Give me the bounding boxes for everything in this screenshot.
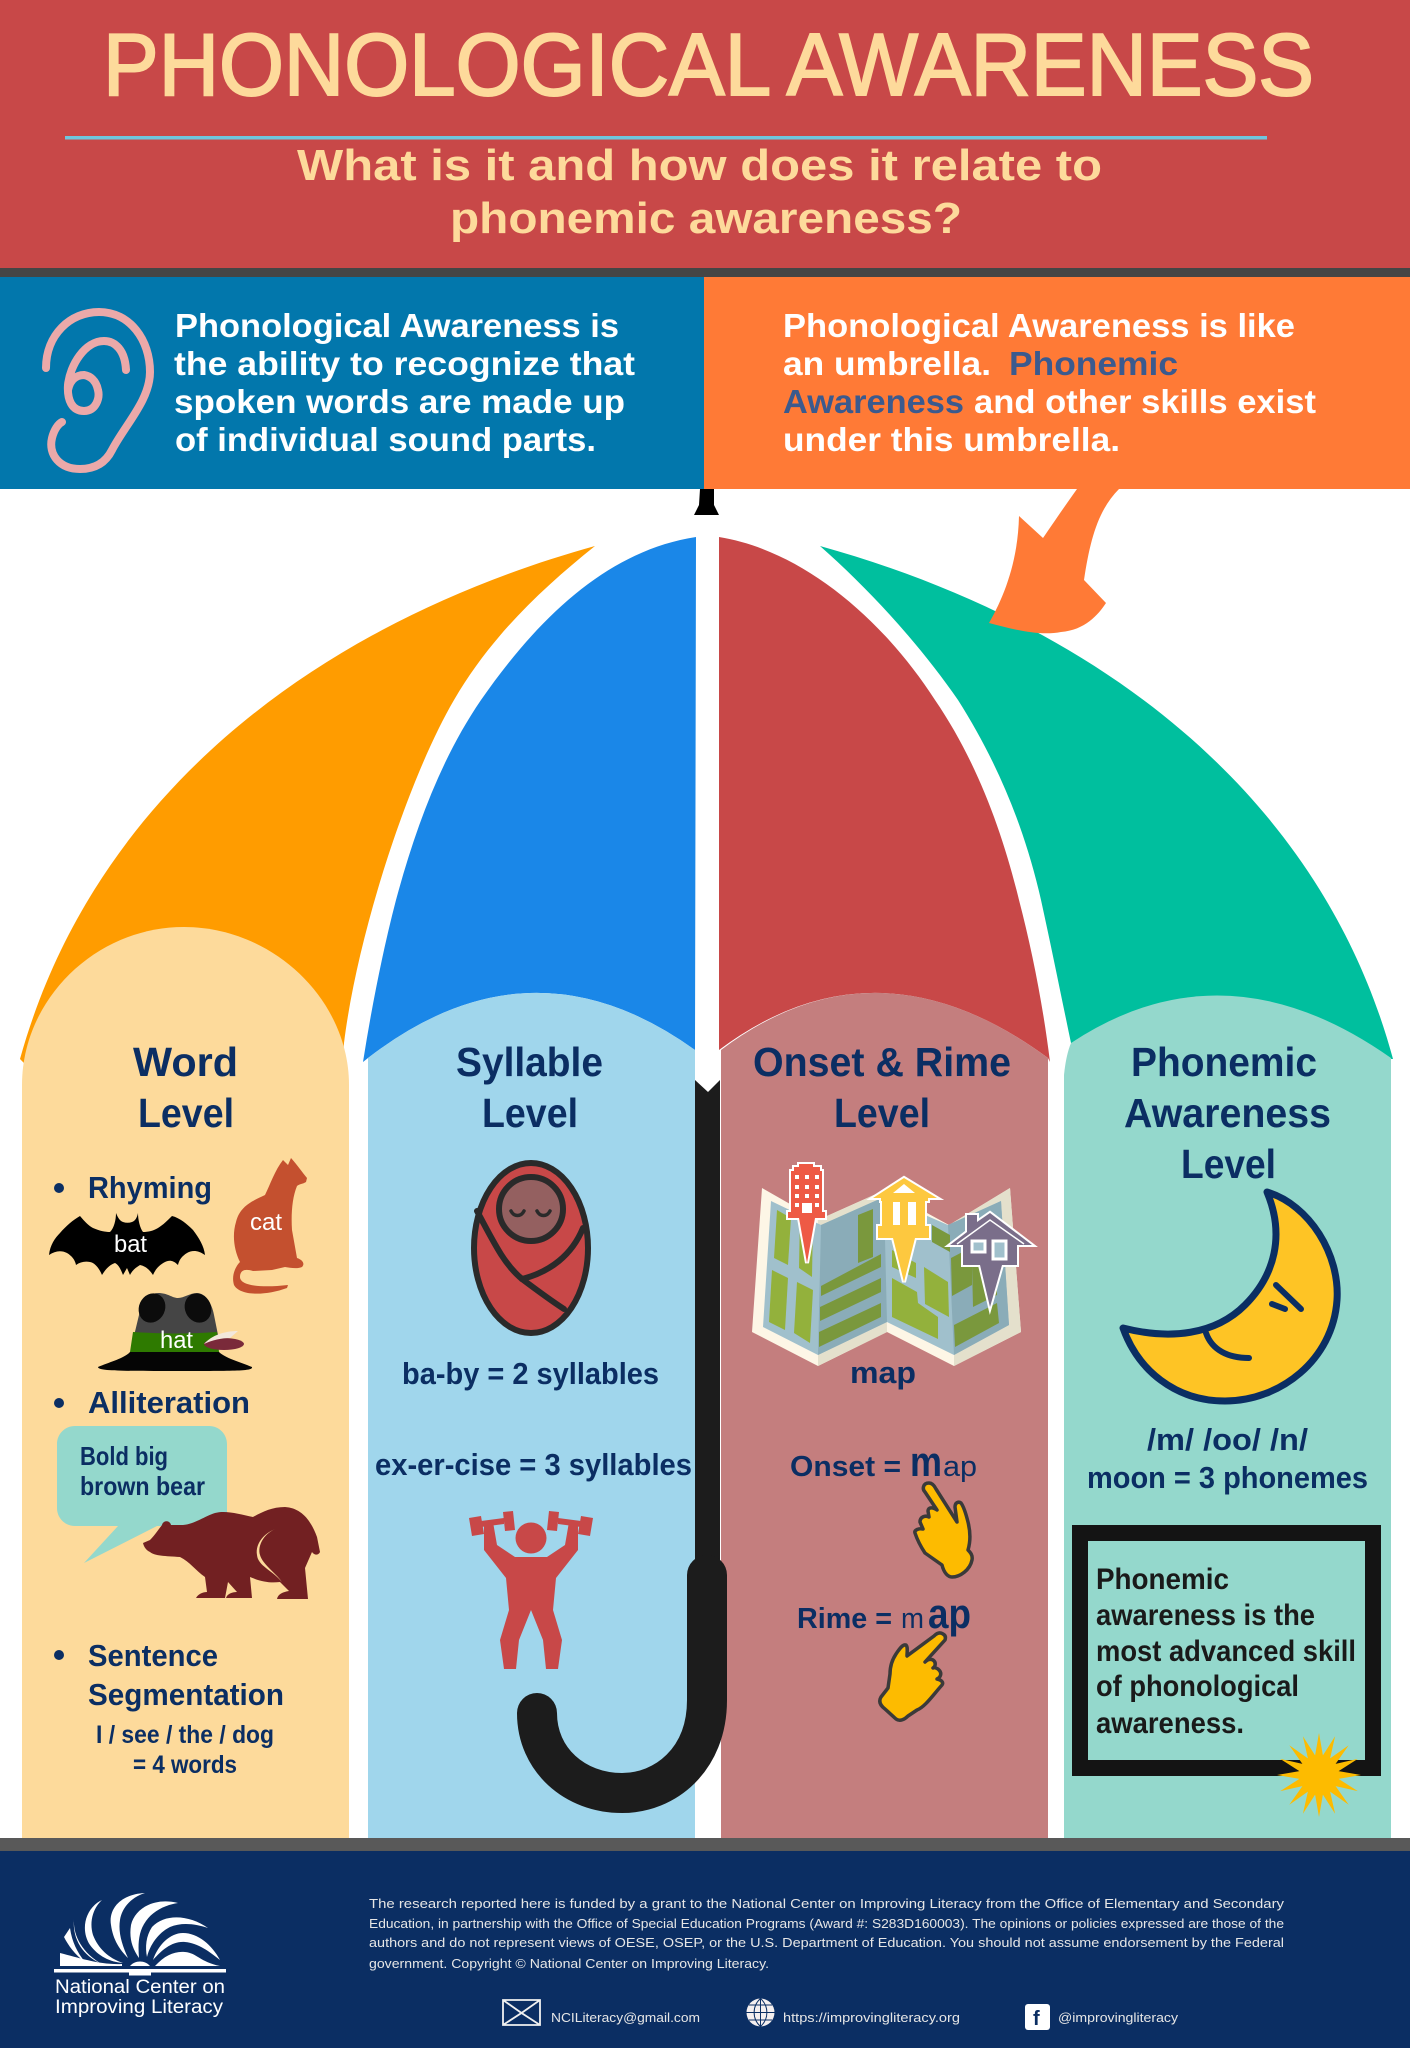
analogy text [783,307,1316,458]
contact: website: https://improvingliteracy.org [783,2010,960,2025]
callout: most advanced skill: of phonological [1096,1670,1299,1703]
heading: syllable level [456,1039,603,1136]
icon: cat: cat [250,1209,282,1236]
analogy text: Phonemic [1009,345,1178,382]
speech bubble: brown bear [80,1471,205,1501]
heading: onset and rime: Level [834,1090,930,1136]
phoneme example [1087,1422,1368,1495]
analogy text: an umbrella. [783,345,991,382]
icon: map with pins [752,1164,1032,1366]
funding disclaimer: authors and do not represent views of OESE, OSEP, or the U.S. Department of Education. You should not assume endorsement by the Federal [369,1935,1284,1950]
logo: national center on improving literacy: Improving Literacy [55,1997,224,2018]
funding disclaimer: Education, in partnership with the Office of Special Education Programs (Award #: S283D160003). The opinions or policies expressed are those of the [369,1916,1284,1931]
callout: most advanced skill: awareness. [1096,1707,1244,1740]
funding disclaimer: government. Copyright © National Center on Improving Literacy. [369,1956,769,1971]
analogy text: Phonological Awareness is like [783,307,1295,344]
icon: star burst [1277,1733,1361,1817]
panel: word level [22,927,349,1838]
callout: most advanced skill [1080,1533,1373,1817]
funding disclaimer [369,1896,1285,1971]
contact: facebook: @improvingliteracy [1058,2010,1179,2025]
footer [0,1838,1410,2048]
umbrella canopy [20,537,1393,1100]
panel: syllable level [368,993,695,1838]
heading: onset and rime [753,1039,1011,1136]
heading: phonemic awareness: Phonemic [1131,1039,1317,1085]
panel: definition [0,277,704,489]
heading: phonemic awareness [1124,1039,1331,1187]
sentence segmentation [54,1638,284,1779]
analogy text: and other skills exist [974,383,1316,420]
rime example [797,1590,971,1637]
icon: pointing hand up [915,1483,972,1577]
icon: purple house pin [950,1213,1032,1307]
funding disclaimer: The research reported here is funded by a grant to the National Center on Improving Literacy from the Office of Elementary and Secondary [369,1896,1285,1911]
map label: map [850,1355,916,1390]
heading: word level: Word [133,1039,238,1085]
subtitle [297,141,1102,243]
heading: syllable level: Syllable [456,1039,603,1085]
speech bubble: Bold big [80,1441,168,1471]
rime example: Rime = [797,1603,892,1635]
header band [0,0,1410,277]
definition text: Phonological Awareness is [175,307,619,344]
analogy text: Awareness [783,383,964,420]
sentence segmentation: I / see / the / dog [96,1721,274,1749]
contact: website [746,1998,960,2026]
panel: phonemic awareness level [1064,995,1391,1838]
contact: email [503,2000,700,2025]
icon: bear [143,1507,320,1599]
icon: baby [474,1163,588,1333]
umbrella handle [537,1060,720,1793]
icon: bat [49,1213,205,1275]
heading: onset and rime: Onset & Rime [753,1039,1011,1085]
logo: national center on improving literacy [54,1893,226,2018]
onset example: m [910,1438,942,1485]
syllable examples [375,1356,692,1482]
panel: onset and rime level [721,993,1048,1838]
contact: facebook: f [1033,2008,1040,2030]
arrow to phonemic awareness [989,489,1119,633]
analogy text: under this umbrella. [783,421,1120,458]
rime example: ap [928,1590,971,1637]
panel: umbrella analogy [704,277,1410,489]
onset example: ap [943,1451,977,1483]
rhyming label: Rhyming [88,1170,212,1205]
sentence segmentation: Segmentation [88,1677,284,1712]
alliteration label: Alliteration [88,1385,250,1420]
subtitle: phonemic awareness? [450,194,962,243]
definition text: of individual sound parts. [175,421,596,458]
icon: hat: hat [160,1327,193,1354]
onset example: Onset = [790,1451,901,1483]
callout: most advanced skill: Phonemic [1096,1563,1229,1596]
icon: bat: bat [114,1231,147,1258]
heading: phonemic awareness: Level [1181,1141,1276,1187]
icon: exercise figure [469,1511,593,1669]
title: PHONOLOGICAL AWARENESS [103,15,1314,114]
phoneme example: /m/ /oo/ /n/ [1147,1422,1308,1457]
icon: ear [46,312,150,469]
icon: yellow bank pin [873,1178,937,1282]
callout: most advanced skill: most advanced skill [1096,1635,1356,1668]
definition text [174,307,635,458]
rime example: m [901,1603,924,1635]
onset example [790,1438,977,1485]
icon: pointing hand diagonal [880,1633,945,1720]
heading: word level [133,1039,238,1136]
speech bubble [57,1426,227,1563]
syllable examples: ex-er-cise = 3 syllables [375,1447,692,1482]
definition text: spoken words are made up [174,383,625,420]
icon: cat [233,1158,307,1294]
subtitle: What is it and how does it relate to [297,141,1102,190]
contact: facebook [1025,2004,1179,2030]
icon: red building pin [788,1164,825,1263]
umbrella tip [694,489,719,515]
heading: phonemic awareness: Awareness [1124,1090,1331,1136]
phoneme example: moon = 3 phonemes [1087,1460,1368,1495]
sentence segmentation: Sentence [88,1638,218,1673]
heading: word level: Level [138,1090,234,1136]
sentence segmentation: = 4 words [133,1751,237,1779]
icon: hat [98,1289,252,1371]
callout: most advanced skill: awareness is the [1096,1599,1315,1632]
logo: national center on improving literacy: National Center on [55,1977,225,1998]
definition text: the ability to recognize that [174,345,635,382]
syllable examples: ba-by = 2 syllables [402,1356,659,1391]
heading: syllable level: Level [482,1090,578,1136]
contact: email: NCILiteracy@gmail.com [551,2010,700,2025]
icon: moon [1123,1192,1337,1401]
